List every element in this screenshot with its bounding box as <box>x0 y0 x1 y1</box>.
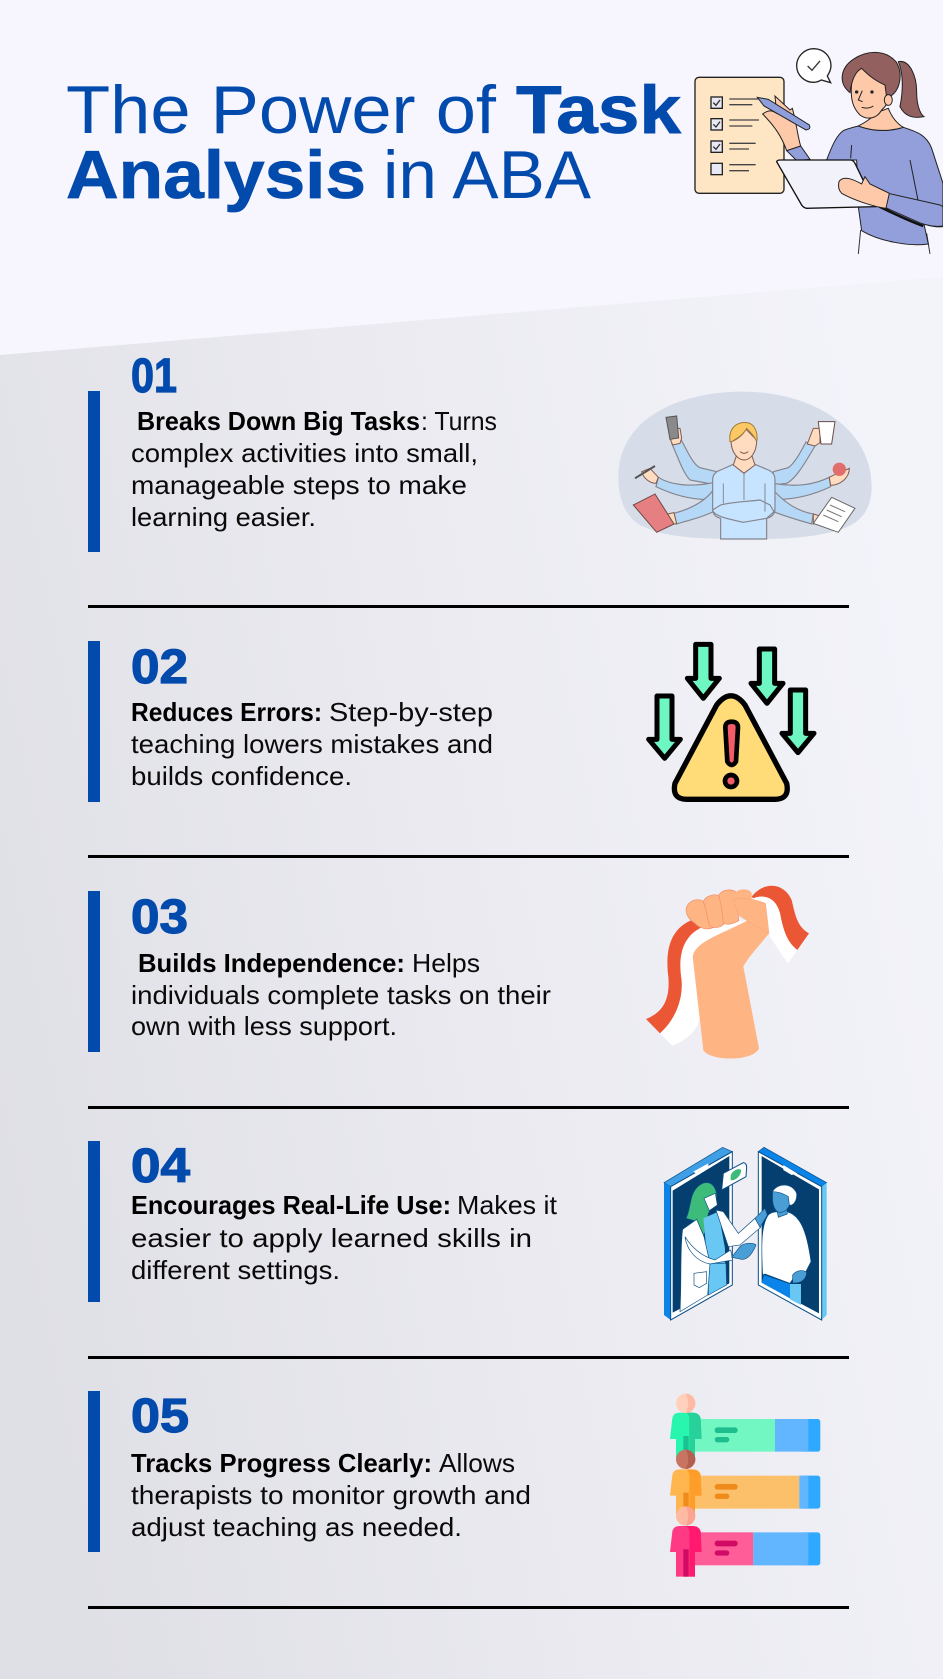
text block: manageable steps to make <box>131 470 467 500</box>
text block: complex activities into small, <box>131 438 478 468</box>
text block <box>131 406 497 532</box>
panel: item 3 <box>88 886 809 1059</box>
accent bar <box>88 891 100 1052</box>
panel: item 4 <box>88 1140 827 1320</box>
panel: item 5 <box>88 1390 820 1577</box>
title: The Power of <box>66 72 496 148</box>
title: Analysis <box>66 137 366 213</box>
text block: Encourages Real-Life Use: <box>131 1190 451 1220</box>
text block <box>131 1190 558 1285</box>
divider <box>88 855 849 858</box>
divider <box>88 1106 849 1109</box>
text block: individuals complete tasks on their <box>131 980 551 1010</box>
text block: Step-by-step <box>329 697 493 727</box>
text block: learning easier. <box>131 502 316 532</box>
title: Task <box>516 72 681 148</box>
icon: warning triangle with arrows <box>649 644 814 799</box>
icon: fist with ribbon <box>646 886 809 1059</box>
text block <box>131 697 493 791</box>
panel: item 1 <box>88 350 872 552</box>
number: 03 <box>131 891 188 944</box>
accent bar <box>88 1391 100 1552</box>
text block: Reduces Errors: <box>131 697 322 727</box>
title <box>66 72 681 213</box>
accent bar <box>88 1141 100 1302</box>
icon: people progress bars <box>670 1394 820 1577</box>
text block <box>131 1448 531 1542</box>
text block: Helps <box>412 948 480 978</box>
number: 01 <box>131 350 177 403</box>
number: 05 <box>131 1390 189 1443</box>
text block: : Turns <box>421 406 497 436</box>
accent bar <box>88 391 100 552</box>
number: 02 <box>131 641 188 694</box>
text block: easier to apply learned skills in <box>131 1223 532 1253</box>
title: in ABA <box>383 137 592 213</box>
panel: item 2 <box>88 641 814 802</box>
divider <box>88 1606 849 1609</box>
icon: multitasking man <box>618 392 872 539</box>
text block: Tracks Progress Clearly: <box>131 1448 432 1478</box>
icon: woman with checklist <box>695 49 943 254</box>
text block: builds confidence. <box>131 761 352 791</box>
divider <box>88 1356 849 1359</box>
icon: doctor and patient on phones <box>664 1147 827 1320</box>
accent bar <box>88 641 100 802</box>
text block: adjust teaching as needed. <box>131 1512 462 1542</box>
text block <box>131 948 551 1041</box>
text block: own with less support. <box>131 1011 397 1041</box>
text block: therapists to monitor growth and <box>131 1480 531 1510</box>
text block: teaching lowers mistakes and <box>131 729 493 759</box>
text block: Breaks Down Big Tasks <box>137 406 420 436</box>
number: 04 <box>131 1140 190 1193</box>
text block: Makes it <box>457 1190 558 1220</box>
text block: Allows <box>439 1448 515 1478</box>
divider <box>88 605 849 608</box>
text block: different settings. <box>131 1255 340 1285</box>
text block: Builds Independence: <box>138 948 405 978</box>
